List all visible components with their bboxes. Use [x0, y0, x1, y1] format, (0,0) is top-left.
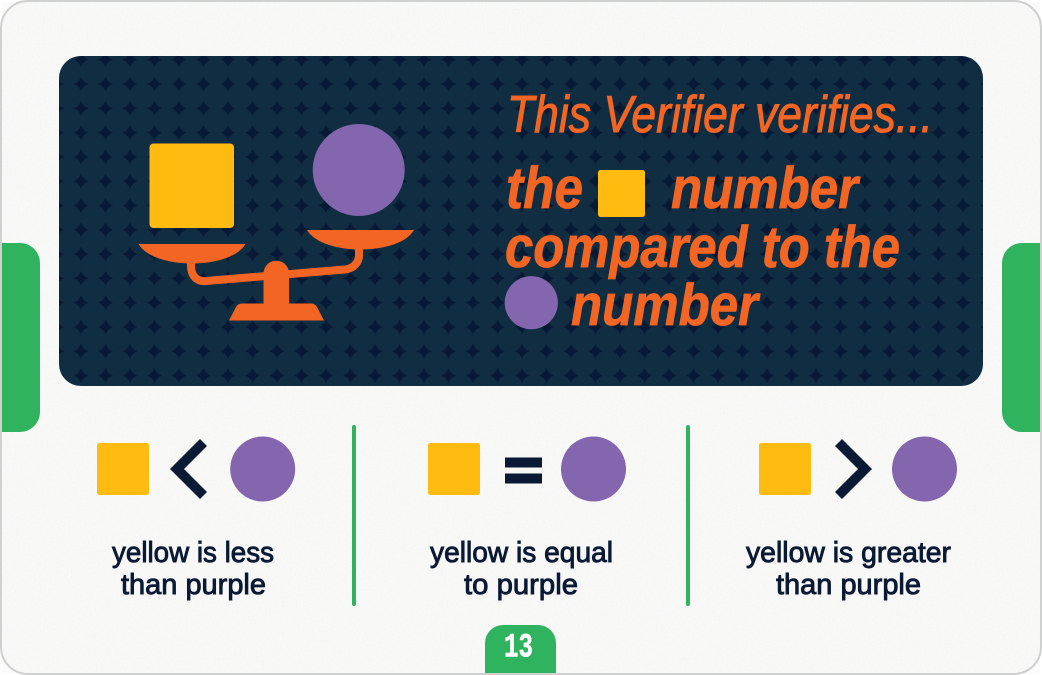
icon: yellow square: [97, 443, 149, 495]
purple circle on scale: [313, 124, 405, 216]
icon: inline yellow square: [598, 170, 645, 217]
panel: yellow equal to purple: [428, 436, 626, 601]
clue text line 3: number: number: [571, 273, 761, 338]
icon: yellow square: [759, 443, 811, 495]
caption: to purple: [464, 569, 578, 601]
divider: [352, 425, 356, 606]
icon: purple circle: [230, 436, 295, 502]
clue text line 2: compared to the: [505, 215, 900, 280]
clue text line 1: number: number: [671, 156, 861, 221]
page number: 13: [504, 630, 533, 668]
right green tab: [1002, 243, 1040, 432]
clue text line 1: the: the: [506, 156, 583, 221]
icon: equals sign: [505, 458, 542, 484]
panel: yellow less than purple: [97, 436, 295, 601]
caption: yellow is equal: [430, 537, 613, 569]
scale body: [138, 230, 414, 320]
caption: than purple: [121, 569, 266, 601]
caption: yellow is greater: [746, 537, 951, 569]
left green tab: [2, 243, 40, 432]
divider: [686, 425, 690, 606]
heading: This Verifier verifies: This Verifier verifies...: [507, 86, 933, 144]
icon: less than sign: [170, 439, 207, 499]
yellow square on scale: [150, 144, 234, 228]
caption: yellow is less: [112, 537, 274, 569]
icon: purple circle: [892, 436, 957, 502]
caption: than purple: [776, 569, 921, 601]
panel: yellow greater than purple: [746, 436, 957, 601]
icon: purple circle: [561, 436, 626, 502]
panel: verifier clue: [59, 56, 983, 386]
icon: yellow square: [428, 443, 480, 495]
icon: balance scale with yellow square and purple circle: [138, 124, 414, 320]
icon: inline purple circle: [505, 276, 558, 329]
page number tab: [485, 625, 556, 673]
icon: greater than sign: [835, 439, 872, 499]
